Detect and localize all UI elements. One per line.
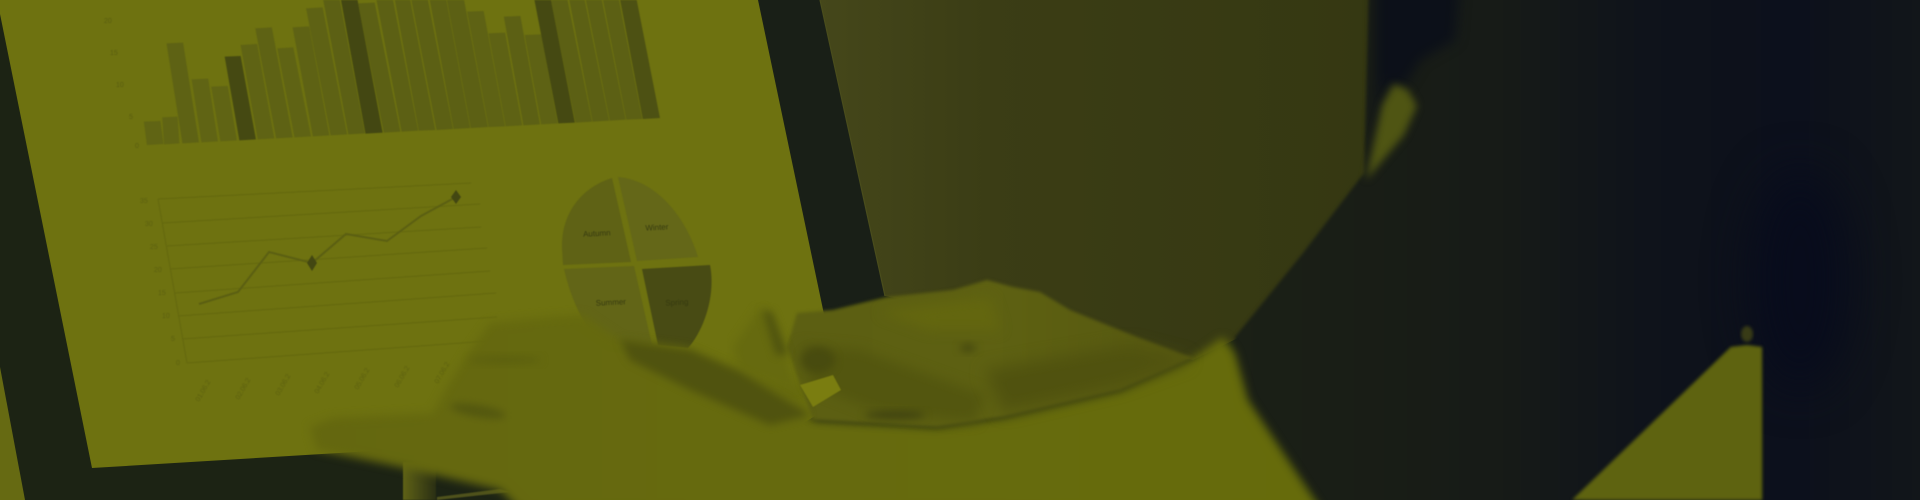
- value axis labels: [140, 198, 180, 367]
- date axis labels: 06.06.2: [394, 365, 411, 389]
- shirt cuff at right: [1572, 345, 1762, 500]
- wedge: winter: [618, 177, 698, 261]
- left hand and arm: [310, 315, 1321, 500]
- bar chart axis labels: 20: [104, 18, 112, 25]
- line series: [199, 197, 456, 304]
- marker: [307, 255, 317, 271]
- cuff button: [1741, 326, 1753, 342]
- bar chart axis labels: 5: [129, 114, 133, 121]
- hand shadows: [449, 310, 1190, 425]
- hand highlights: [880, 298, 1000, 330]
- jacket shadows: [1376, 0, 1850, 390]
- date axis labels: 07.06.2: [434, 361, 451, 385]
- laptop bezel edge highlight: [820, 0, 885, 296]
- date axis labels: 01.06.2: [195, 379, 212, 403]
- value axis labels: 30: [145, 221, 153, 228]
- sliver of desk at far left: [0, 367, 25, 500]
- bar chart axis labels: [104, 18, 139, 150]
- wall backdrop: [820, 0, 1375, 360]
- bar chart axis labels: 15: [110, 50, 118, 57]
- keyboard glint: [403, 462, 510, 500]
- wedge: spring: [642, 265, 712, 348]
- date axis labels: 05.06.2: [354, 367, 371, 391]
- gap highlight between fingers: [800, 375, 841, 407]
- dark bezel right of screen: [758, 0, 885, 312]
- bar chart: [104, 0, 660, 150]
- jacket: [1235, 0, 1920, 500]
- value axis labels: 20: [154, 267, 162, 274]
- pie labels: Winter: [645, 222, 669, 233]
- wedge: autumn: [562, 178, 631, 265]
- thumb: [733, 308, 797, 390]
- date axis labels: 03.06.2: [275, 373, 292, 397]
- wedge: summer: [564, 266, 652, 345]
- line chart: [140, 183, 502, 403]
- bar chart axis labels: 10: [116, 82, 124, 89]
- value axis labels: 35: [140, 198, 148, 205]
- pie labels: Summer: [596, 297, 627, 308]
- value axis labels: 0: [176, 360, 180, 367]
- bar chart axis labels: 0: [135, 143, 139, 150]
- laptop screen: [0, 0, 842, 468]
- value axis labels: 15: [158, 290, 166, 297]
- value axis labels: 25: [150, 244, 158, 251]
- value axis labels: 5: [171, 336, 175, 343]
- right hand: [787, 280, 1193, 427]
- pie labels: Autumn: [583, 228, 611, 239]
- date axis labels: 04.06.2: [314, 371, 331, 395]
- collar highlight: [1366, 84, 1417, 180]
- value axis labels: 10: [162, 313, 170, 320]
- date axis labels: [195, 361, 451, 403]
- pie labels: [583, 222, 689, 308]
- pie chart: [562, 177, 712, 348]
- marker: [451, 190, 461, 204]
- chart grid: [158, 183, 502, 363]
- pie labels: Spring: [665, 297, 689, 308]
- date axis labels: 02.06.2: [235, 377, 252, 401]
